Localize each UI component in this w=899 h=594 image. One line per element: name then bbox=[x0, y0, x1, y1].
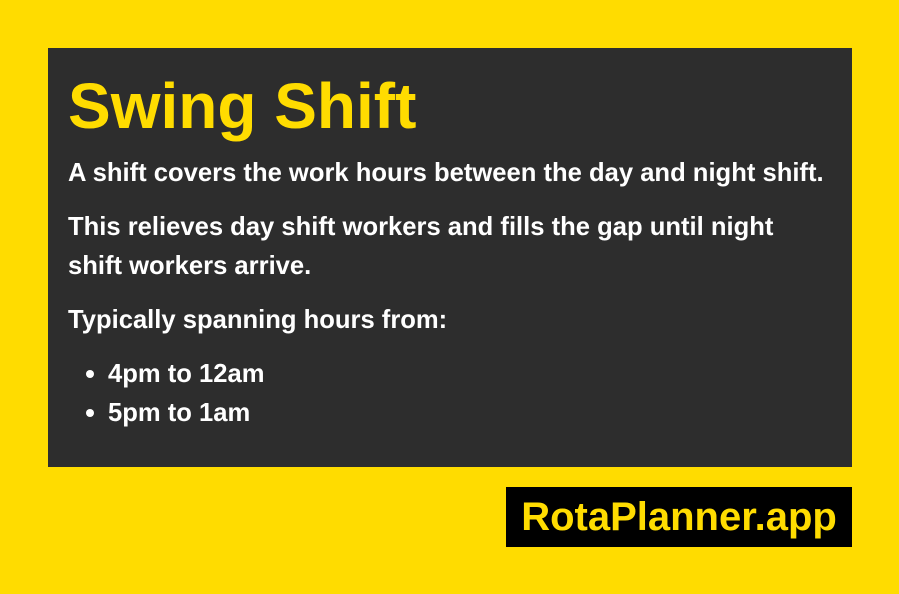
text: purpose paragraph: shift workers arrive. bbox=[68, 252, 311, 280]
panel: definition bbox=[48, 48, 852, 467]
brand badge: RotaPlanner.app bbox=[521, 495, 837, 539]
text: definition sentence: A shift covers the work hours between the day and night shift. bbox=[68, 159, 824, 187]
list item: 4pm to 12am: 4pm to 12am bbox=[108, 360, 264, 388]
brand badge bbox=[506, 487, 852, 547]
text: purpose paragraph bbox=[68, 213, 774, 280]
title: Swing Shift bbox=[68, 70, 416, 142]
text: purpose paragraph: This relieves day shift workers and fills the gap until night bbox=[68, 213, 773, 241]
list item: 5pm to 1am: 5pm to 1am bbox=[108, 399, 250, 427]
text: hours intro: Typically spanning hours from: bbox=[68, 306, 447, 334]
list: typical hours bbox=[86, 360, 264, 427]
